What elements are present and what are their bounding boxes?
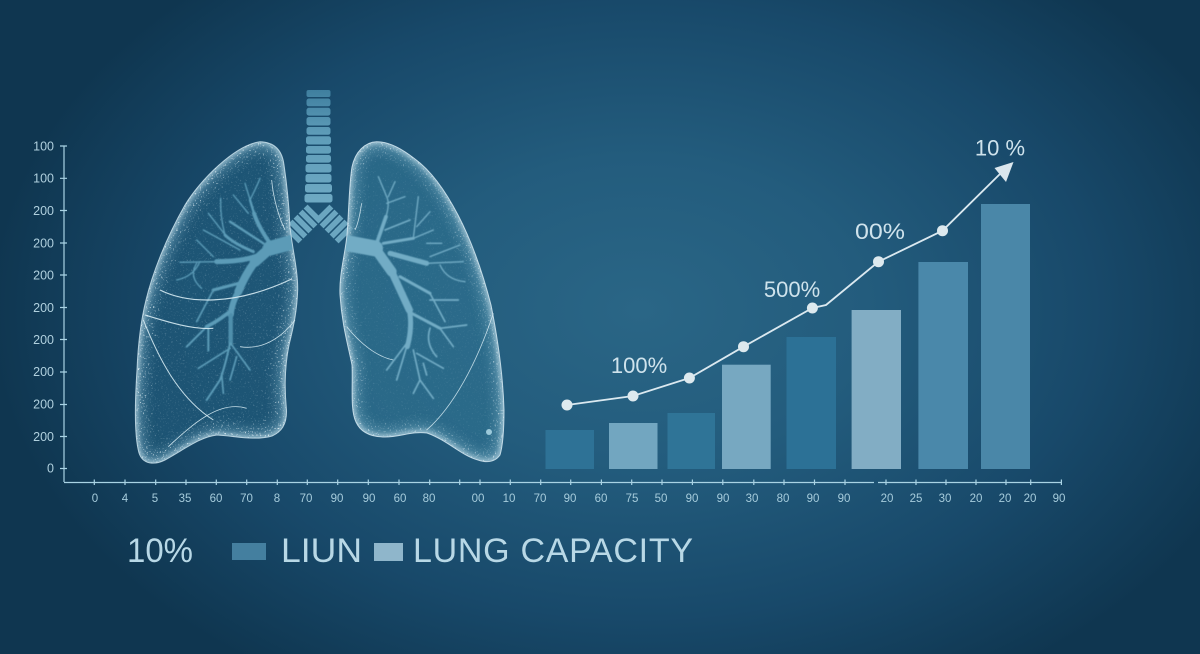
x axis labels: 00: [472, 493, 484, 505]
legend: LUNG CAPACITY: [413, 532, 693, 570]
y axis labels: 200: [33, 365, 54, 379]
x axis labels: 30: [939, 493, 951, 505]
trachea: [291, 90, 346, 236]
x axis labels: 60: [394, 493, 406, 505]
y axis labels: [33, 140, 54, 476]
data labels: 100%: [611, 353, 667, 378]
trend line with arrow: [562, 162, 1014, 410]
x axis labels: 8: [274, 493, 280, 505]
x axis labels: 90: [838, 493, 850, 505]
y axis labels: 200: [33, 268, 54, 282]
data labels: 10 %: [975, 136, 1025, 160]
y axis labels: 200: [33, 204, 54, 218]
y axis labels: 100: [33, 140, 54, 154]
bronchial tree left: [177, 178, 300, 400]
x axis labels: 20: [970, 493, 982, 505]
x axis labels: 20: [1024, 493, 1036, 505]
x axis labels: 70: [240, 493, 253, 505]
y axis labels: 200: [33, 236, 54, 250]
legend: LIUN: [281, 532, 362, 570]
x axis labels: 60: [210, 493, 222, 505]
x axis labels: 30: [746, 493, 758, 505]
x axis labels: 70: [300, 493, 312, 505]
y axis with ticks: [60, 146, 67, 482]
icon: lungs: [120, 90, 515, 475]
x axis labels: 90: [807, 493, 819, 505]
x axis labels: 60: [595, 493, 607, 505]
left lung: [134, 141, 298, 464]
x axis labels: 25: [910, 493, 922, 505]
x axis labels: 90: [1053, 493, 1065, 505]
x axis labels: [92, 493, 1065, 505]
x axis labels: 4: [122, 493, 129, 505]
x axis labels: 10: [503, 493, 515, 505]
bar chart: [546, 204, 1030, 469]
x axis labels: 0: [92, 493, 98, 505]
x axis labels: 20: [999, 493, 1011, 505]
bronchial tree right: [338, 177, 467, 398]
x axis labels: 20: [881, 493, 893, 505]
x axis labels: 90: [363, 493, 375, 505]
x axis labels: 75: [626, 493, 638, 505]
x axis labels: 90: [564, 493, 576, 505]
y axis labels: 100: [33, 172, 54, 186]
x axis with ticks: [64, 480, 1062, 485]
data labels: 500%: [764, 277, 820, 302]
x axis labels: 90: [331, 493, 343, 505]
legend: 10%: [127, 532, 193, 570]
y axis labels: 200: [33, 333, 54, 347]
right lung: [339, 141, 504, 462]
x axis labels: 80: [777, 493, 789, 505]
data labels: [611, 136, 1025, 378]
x axis labels: 80: [423, 493, 435, 505]
legend: [127, 532, 693, 570]
y axis labels: 200: [33, 430, 54, 444]
y axis labels: 200: [33, 301, 54, 315]
x axis labels: 70: [534, 493, 546, 505]
x axis labels: 5: [152, 493, 158, 505]
x axis labels: 90: [686, 493, 698, 505]
x axis labels: 90: [717, 493, 729, 505]
lobe lines right: [347, 203, 493, 430]
y axis labels: 0: [47, 462, 54, 476]
y axis labels: 200: [33, 398, 54, 412]
data labels: 00%: [855, 219, 905, 244]
lobe lines left: [143, 180, 295, 447]
x axis labels: 50: [655, 493, 667, 505]
x axis labels: 35: [179, 493, 191, 505]
